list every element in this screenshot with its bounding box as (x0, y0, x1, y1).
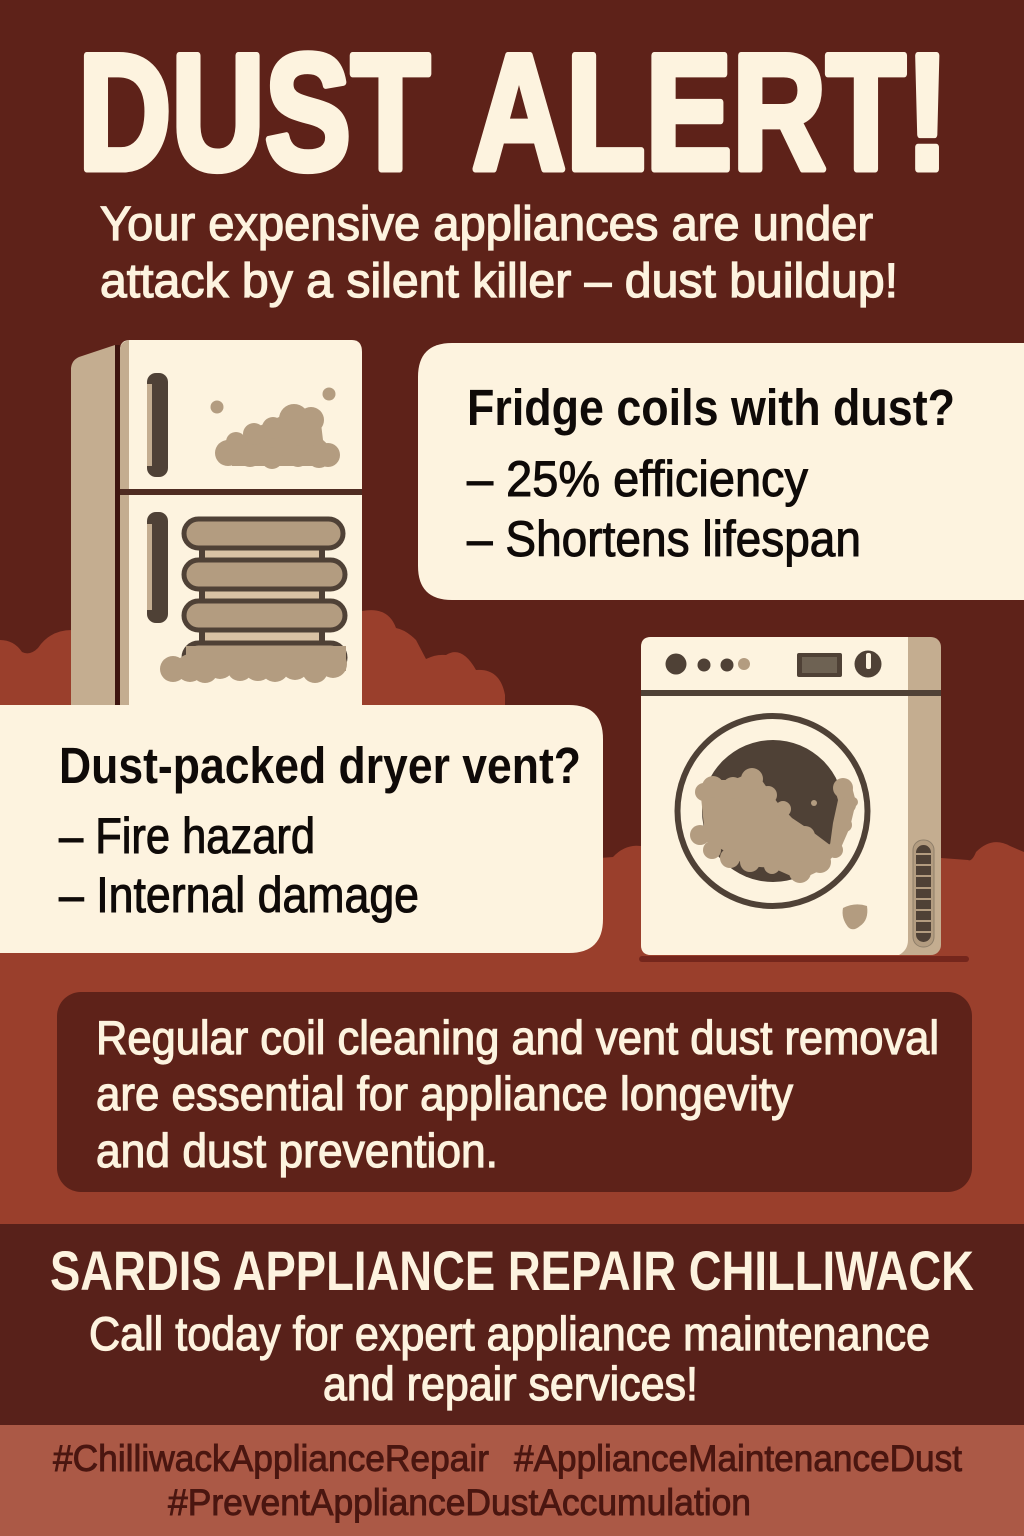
fridge handles (147, 373, 168, 623)
hashtags: #ApplianceMaintenanceDust (514, 1438, 963, 1479)
hashtags (53, 1438, 963, 1523)
card bullets (59, 808, 419, 923)
title (78, 20, 949, 204)
card: fridge coils (418, 343, 1024, 600)
dryer body (641, 637, 941, 955)
dust blob (843, 904, 867, 929)
call to action: Call today for expert appliance maintenance (89, 1307, 930, 1360)
card bullets: – 25% efficiency (467, 451, 808, 507)
title: DUST (78, 20, 430, 204)
fridge door (120, 340, 362, 705)
card: dryer vent (0, 705, 603, 953)
illustration: dusty fridge (71, 340, 362, 705)
dust cloud band (0, 610, 1024, 1230)
advice text: and dust prevention. (96, 1124, 498, 1177)
company footer (0, 1224, 1024, 1425)
subtitle: Your expensive appliances are under (100, 198, 873, 251)
hashtags: #PreventApplianceDustAccumulation (168, 1482, 751, 1523)
advice text (96, 1011, 939, 1177)
card heading: Fridge coils with dust? (467, 379, 955, 436)
dryer vent (913, 840, 934, 947)
control panel (666, 650, 882, 678)
advice text: are essential for appliance longevity (96, 1067, 793, 1120)
advice box (57, 992, 972, 1192)
card heading: Dust-packed dryer vent? (59, 737, 581, 794)
fridge side panel (71, 345, 115, 705)
dust mound on coils (160, 646, 347, 683)
drum (678, 716, 868, 906)
subtitle: attack by a silent killer – dust buildup! (100, 255, 898, 308)
card bullets: – Shortens lifespan (467, 511, 861, 567)
call to action (89, 1307, 930, 1410)
hashtags: #ChilliwackApplianceRepair (53, 1438, 489, 1479)
subtitle (100, 198, 898, 308)
dust in drum (690, 768, 858, 883)
advice text: Regular coil cleaning and vent dust removal (96, 1011, 939, 1064)
dust-clogged coils (160, 519, 347, 683)
card bullets: – Fire hazard (59, 808, 315, 864)
illustration: dusty dryer (639, 637, 969, 962)
card bullets (467, 451, 861, 567)
call to action: and repair services! (323, 1357, 698, 1410)
hashtag strip (0, 1425, 1024, 1536)
dust on freezer door (210, 388, 340, 469)
card bullets: – Internal damage (59, 867, 419, 923)
